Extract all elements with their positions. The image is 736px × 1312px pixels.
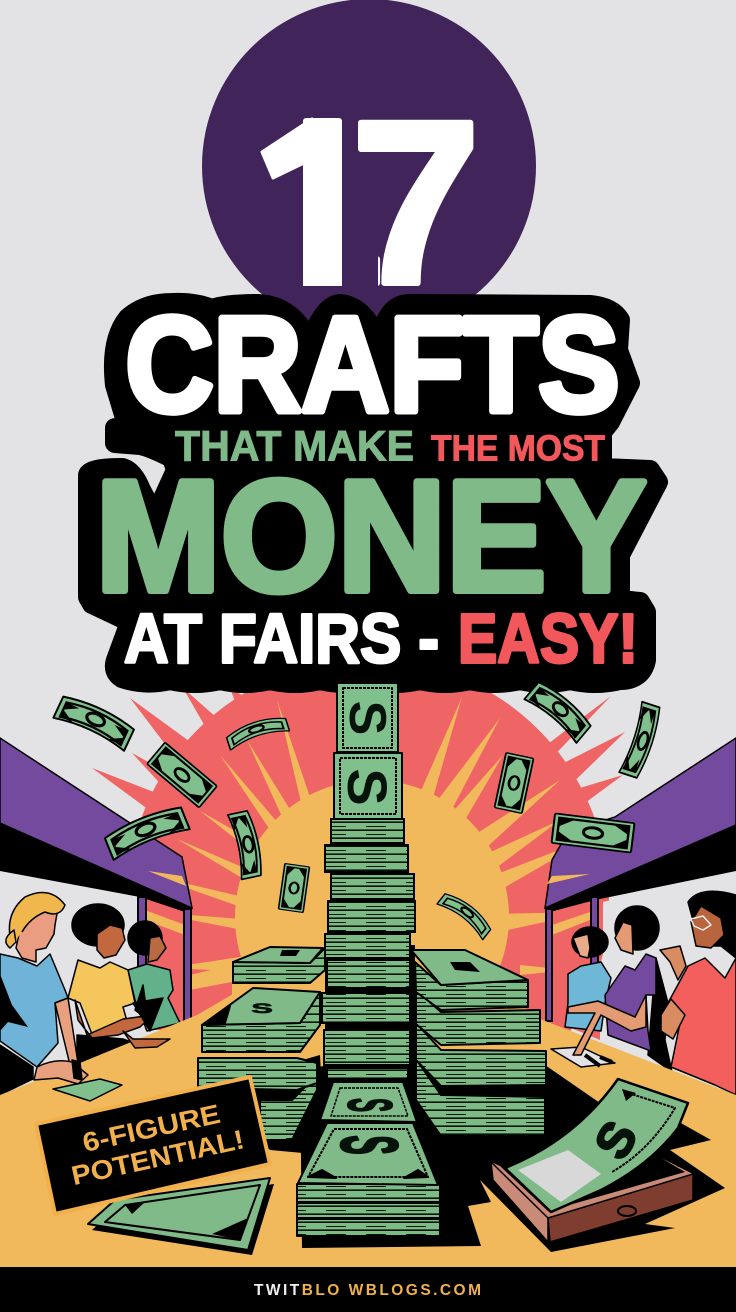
title: 17: 1 bbox=[254, 73, 384, 333]
stack shadows bbox=[198, 945, 725, 1252]
flying bills bbox=[53, 679, 663, 940]
title: at fairs: AT FAIRS - bbox=[124, 600, 439, 678]
person: purple shirt bbox=[605, 906, 672, 1072]
person: teal shirt bbox=[565, 927, 611, 1031]
title black backing bbox=[88, 303, 658, 683]
right stacks bbox=[411, 950, 546, 1136]
front stack with two bills: S bbox=[335, 1098, 405, 1112]
front stack with two bills: S bbox=[325, 1135, 414, 1155]
title: CRAFTS: CRAFTS bbox=[126, 289, 620, 440]
footer bar bbox=[0, 1267, 736, 1312]
purple circle bbox=[202, 0, 536, 333]
person: glasses, red shirt bbox=[660, 891, 736, 1095]
sign text bbox=[62, 1095, 247, 1191]
money tower stack bbox=[322, 819, 415, 1079]
title: MONEY: MONEY bbox=[96, 448, 646, 624]
sign text: POTENTIAL! bbox=[69, 1124, 247, 1191]
subtitle: that make: THAT MAKE bbox=[175, 422, 414, 470]
left stacks bbox=[198, 947, 325, 1140]
right tent bbox=[545, 738, 736, 1100]
footer url: TWITBLO WBLOGS.COM bbox=[254, 1282, 481, 1299]
bill under sign bbox=[88, 1178, 274, 1255]
person: blonde, blue shirt bbox=[0, 892, 78, 1095]
top bills on tower: S bbox=[336, 768, 399, 806]
bill on cash box: S bbox=[583, 1112, 649, 1168]
left stacks: S bbox=[251, 1001, 273, 1016]
title: easy: EASY! bbox=[458, 600, 638, 678]
subtitle: the most: THE MOST bbox=[431, 428, 605, 468]
title: 17 bbox=[254, 73, 481, 333]
title: 17: 7 bbox=[351, 73, 481, 333]
table bbox=[0, 990, 736, 1267]
front stack with two bills bbox=[297, 1082, 440, 1236]
sunburst bbox=[92, 659, 625, 1141]
cash box bbox=[491, 1148, 693, 1242]
left tent bbox=[0, 738, 192, 1100]
person: green shirt bbox=[128, 921, 180, 1031]
person: yellow shirt bbox=[68, 904, 145, 1070]
bill on cash box bbox=[505, 1079, 688, 1212]
people's arms and hands on table bbox=[34, 995, 646, 1101]
top bills on tower: S bbox=[338, 701, 396, 735]
top bills on tower bbox=[334, 683, 402, 819]
sign text: 6-FIGURE bbox=[80, 1099, 223, 1158]
sign: 6-figure potential bbox=[36, 1077, 270, 1214]
